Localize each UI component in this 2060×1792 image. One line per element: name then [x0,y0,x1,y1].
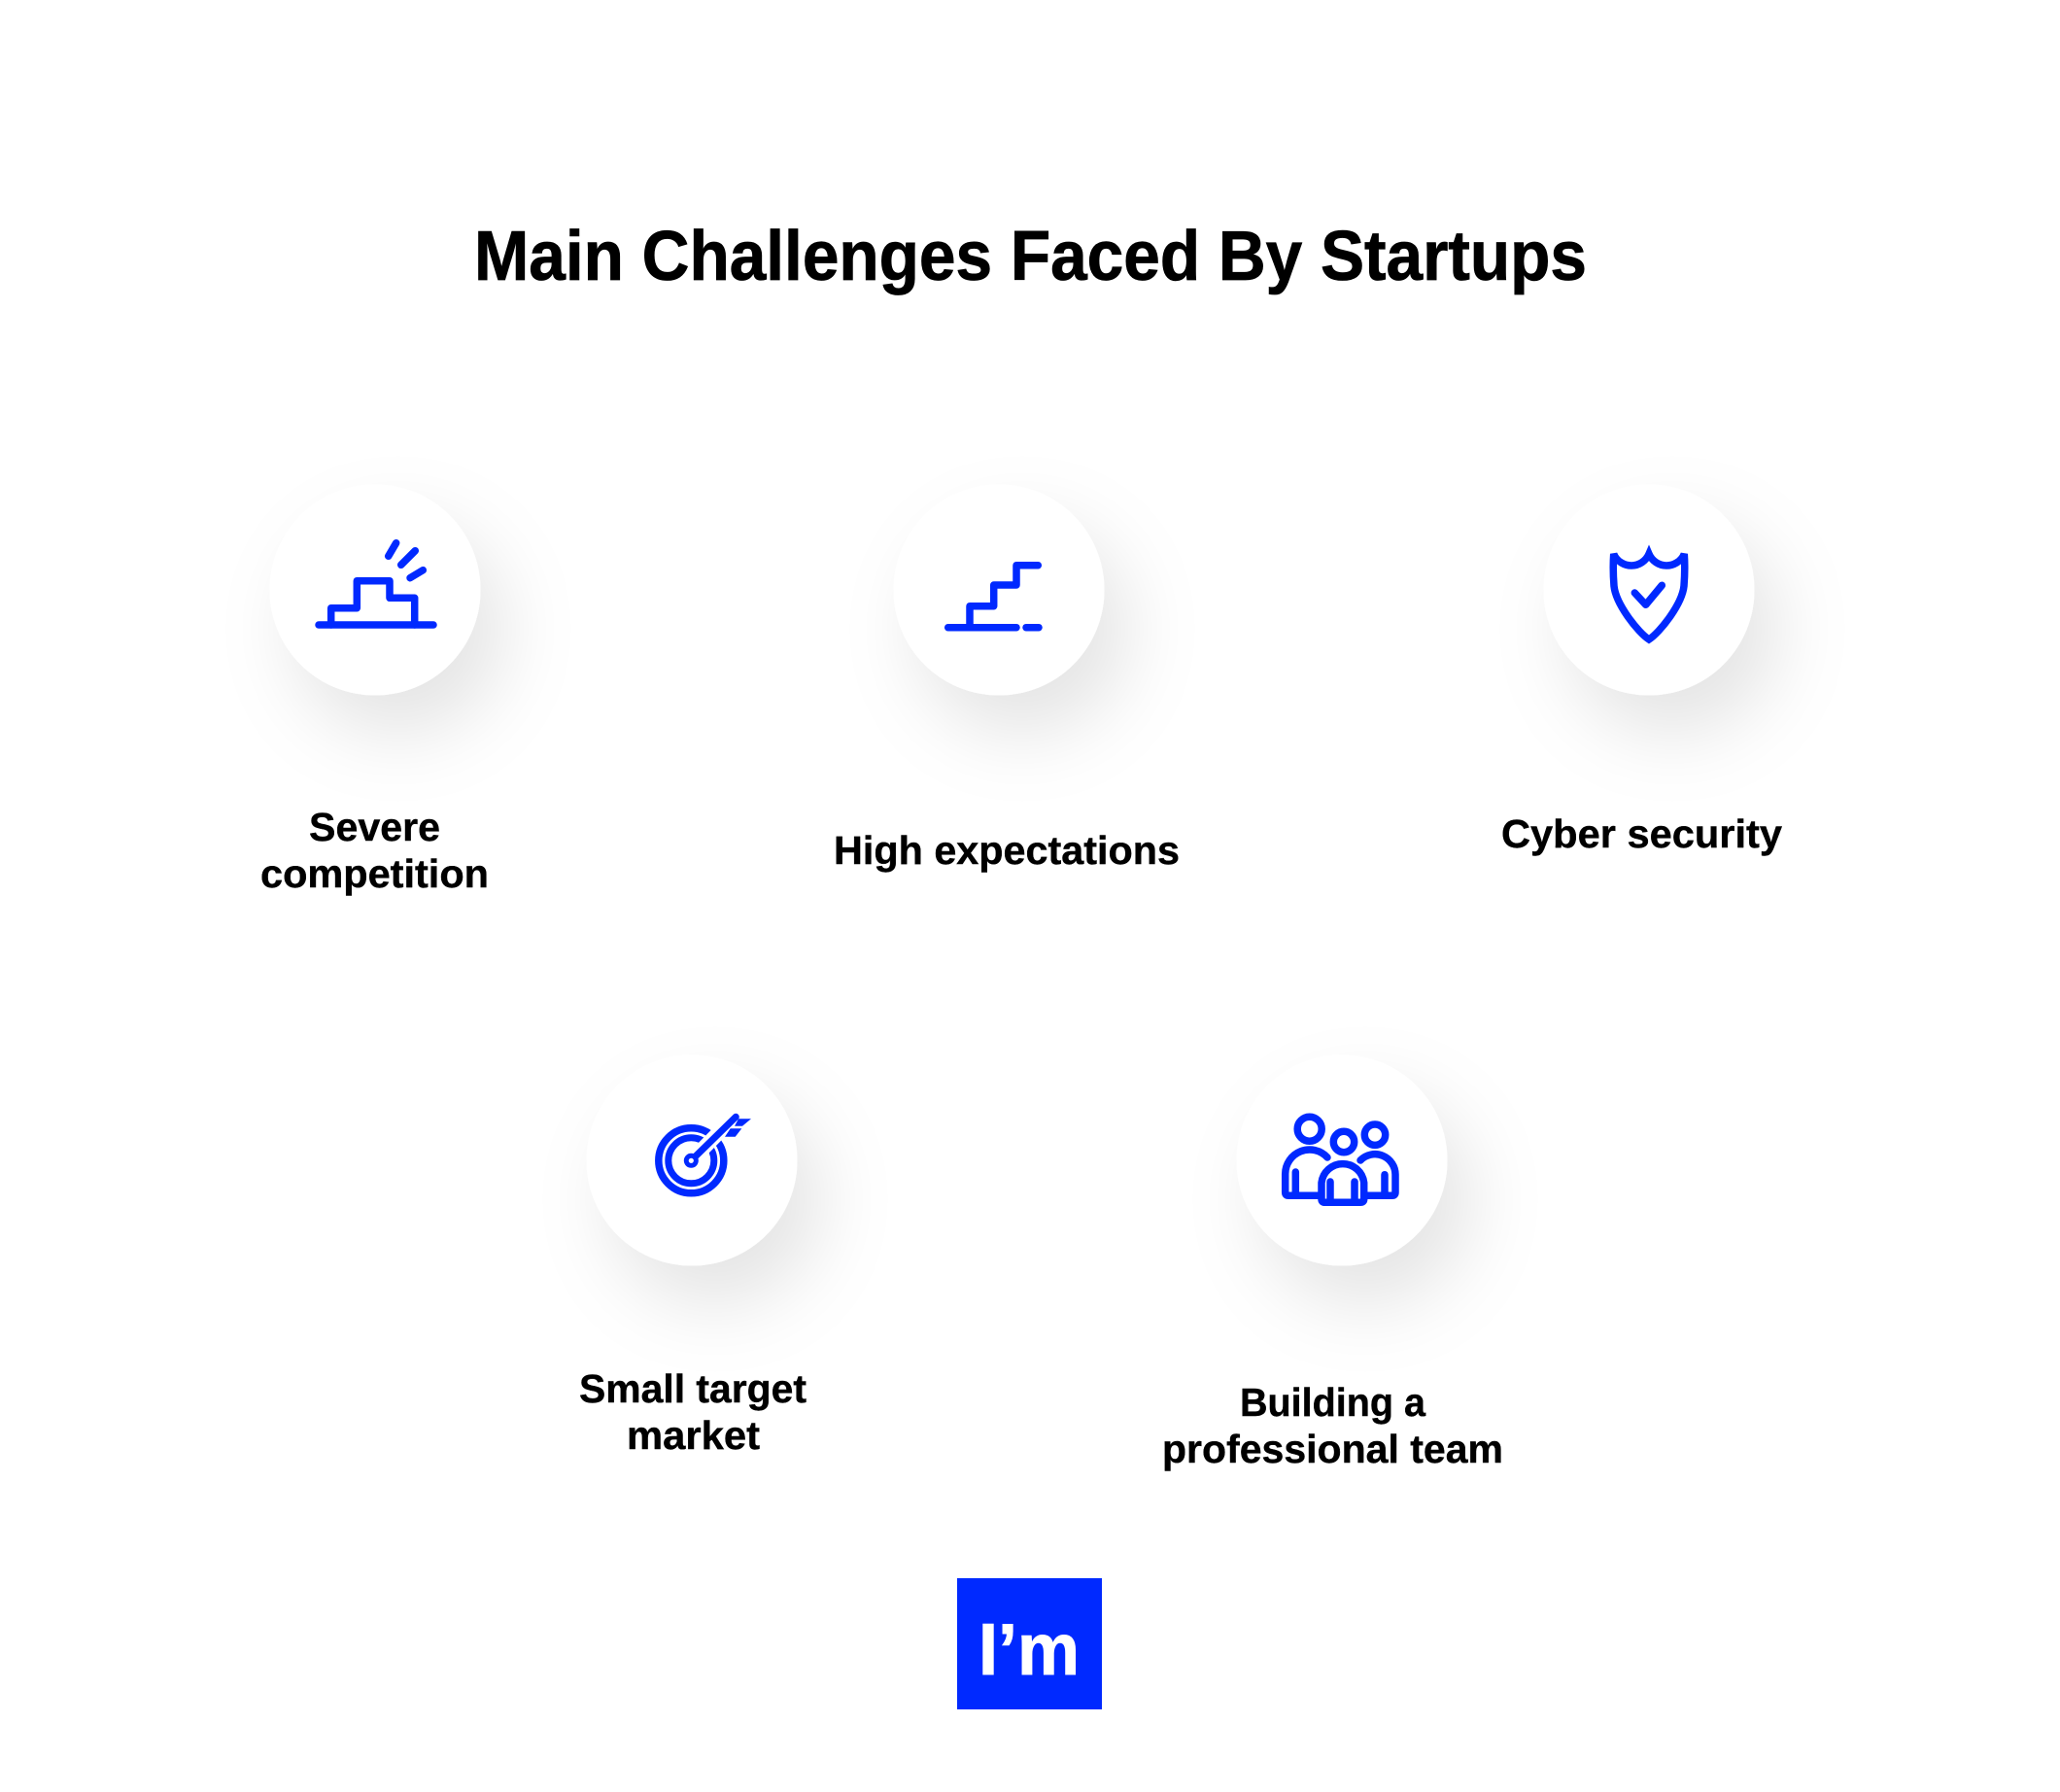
label: building a professional team: professional team [1162,1427,1503,1471]
panel: building a professional team [1162,1055,1503,1471]
icon circle: high expectations [894,484,1104,696]
label: severe competition [260,805,489,896]
label: high expectations: High expectations [834,828,1180,873]
icon circle: small target market [587,1055,797,1265]
label: small target market [579,1366,807,1458]
label: small target market: market [627,1413,760,1458]
panel: high expectations [834,484,1180,873]
logo [957,1578,1102,1709]
icon circle: cyber security [1543,484,1755,696]
panel: severe competition [260,484,489,896]
icon circle: building a professional team [1236,1055,1448,1265]
icon: target with arrow [659,1117,751,1193]
icon circle: severe competition [270,484,480,696]
panel: small target market [579,1055,807,1458]
label: severe competition: Severe [309,805,440,849]
logo: I’m [978,1608,1080,1690]
label: building a professional team: Building a [1240,1380,1426,1425]
icon: podium [319,543,433,625]
icon: stairs [948,566,1039,628]
icon: team of three people [1286,1117,1395,1202]
label: building a professional team [1162,1380,1503,1471]
title: Main Challenges Faced By Startups [474,218,1587,295]
icon: shield [1613,554,1685,639]
label: severe competition: competition [260,851,489,896]
panel: cyber security [1501,484,1782,856]
label: cyber security: Cyber security [1501,811,1782,856]
label: small target market: Small target [579,1366,807,1411]
